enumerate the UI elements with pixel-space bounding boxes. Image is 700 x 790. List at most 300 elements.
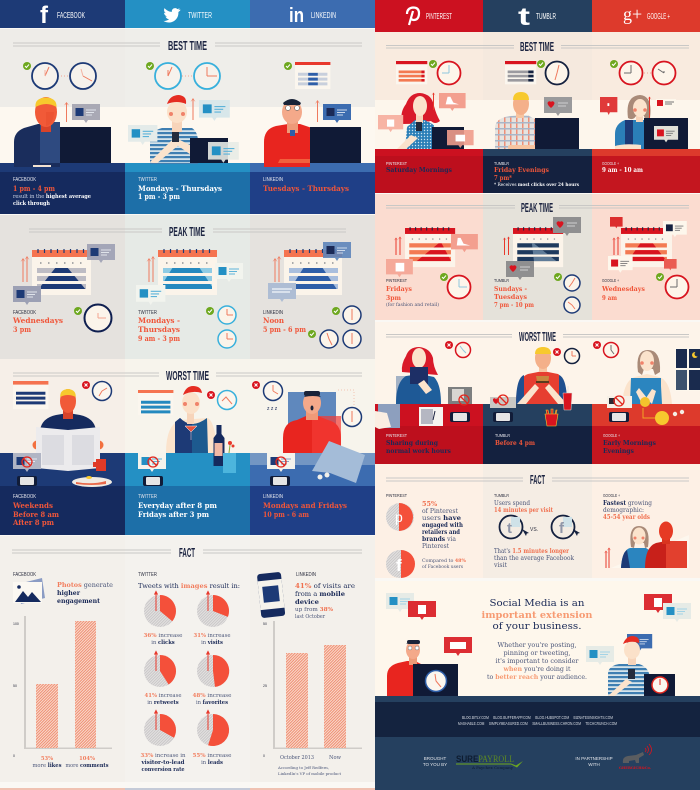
text: Tumblr best time: 7 pm* xyxy=(494,174,512,182)
person: Facebook user at laptop xyxy=(14,97,62,167)
text: LINKEDIN xyxy=(263,494,283,500)
person: man at laptop xyxy=(495,92,536,150)
header: Pinterest xyxy=(375,0,483,32)
bar chart: likes and comments: 50 xyxy=(13,684,17,688)
clock xyxy=(342,408,362,426)
header: Facebook: FACEBOOK xyxy=(57,11,85,20)
text: Twitter best time xyxy=(138,177,222,201)
text: engagement xyxy=(57,597,100,605)
bar chart: likes and comments: 100 xyxy=(13,622,19,626)
text: Facebook best time xyxy=(13,177,92,207)
header: Twitter xyxy=(125,0,250,28)
text: Wednesdays xyxy=(601,285,645,293)
arrow xyxy=(315,100,320,122)
panel: Pinterest peak time xyxy=(386,227,478,308)
clocks xyxy=(308,306,361,348)
heading: worst time (right): WORST TIME xyxy=(519,329,556,344)
text xyxy=(493,547,574,569)
text: Twitter best time: TWITTER xyxy=(138,177,157,183)
panel: Tumblr fact xyxy=(493,493,580,569)
table bands: worst time (left) xyxy=(0,453,375,535)
panel: Pinterest fact xyxy=(386,493,466,578)
clock xyxy=(218,390,236,410)
text: engaged with xyxy=(422,521,463,529)
text: Tumblr best time: TUMBLR xyxy=(494,161,510,166)
text: Twitter best time: Mondays - Thursdays xyxy=(138,184,222,193)
footer sources xyxy=(458,715,617,726)
panel: LinkedIn peak time xyxy=(263,242,361,348)
text: Pinterest best time: Saturday Mornings xyxy=(386,166,452,174)
bubbles xyxy=(128,100,239,163)
bubbles xyxy=(608,217,687,273)
text: Facebook best time: 1 pm - 4 pm xyxy=(13,184,56,193)
bar chart: likes and comments xyxy=(13,616,112,769)
panel: Google+ peak time xyxy=(601,217,688,302)
heading: peak time (right): PEAK TIME xyxy=(521,200,553,215)
calendar xyxy=(513,227,563,267)
text: PINTEREST xyxy=(386,278,407,283)
laptop xyxy=(60,127,111,164)
arrows xyxy=(20,256,30,282)
calendar xyxy=(13,381,48,409)
panel: Twitter best time xyxy=(128,62,239,164)
text: Facebook best time: click through xyxy=(13,201,50,207)
text: Everyday after 8 pm xyxy=(138,501,218,510)
text: last October xyxy=(295,614,325,620)
clock xyxy=(604,342,618,358)
pie: favorites xyxy=(197,652,229,687)
text: Pinterest best time: PINTEREST xyxy=(386,161,407,166)
pie: Facebook: f xyxy=(396,556,402,575)
icon: phone xyxy=(257,572,285,618)
source note: According to Jeff Redfern, xyxy=(277,765,329,770)
text: That's 1.5 minutes longer xyxy=(494,547,569,555)
person: LinkedIn user at laptop xyxy=(264,99,312,167)
bar chart: likes and comments: 0 xyxy=(13,754,15,758)
text: Users spend xyxy=(494,499,530,507)
text xyxy=(57,581,113,605)
text: 9 am xyxy=(602,294,617,302)
text: Weekends xyxy=(12,501,53,510)
text: TUMBLR xyxy=(494,278,510,283)
panel: Google+ fact xyxy=(603,493,689,568)
label: in leads xyxy=(201,760,223,766)
laptop xyxy=(432,127,464,149)
text: Facebook best time: result in the highest average xyxy=(13,194,92,200)
text: Fastest growing xyxy=(603,499,652,507)
in partnership with: IN PARTNERSHIP xyxy=(575,756,613,761)
text: Tumblr best time: * Receives most clicks over 24 hours xyxy=(494,182,579,188)
footer bands xyxy=(375,696,700,790)
text: GOOGLE + xyxy=(602,278,619,283)
source note: LinkedIn's VP of mobile product xyxy=(278,771,341,776)
text: Tuesdays xyxy=(494,293,527,301)
bar chart: likes and comments: more comments xyxy=(66,763,109,769)
logo: SurePayroll: A Paychex Company xyxy=(471,766,513,770)
laptop xyxy=(644,118,688,149)
clock icon: Tumblr: t xyxy=(507,520,512,537)
open papers xyxy=(312,441,365,483)
closing heading: important extension xyxy=(482,610,593,621)
text xyxy=(295,582,355,620)
text: of Facebook users xyxy=(422,564,464,570)
arrow xyxy=(190,98,196,120)
text xyxy=(138,494,218,519)
pie: Pinterest: p xyxy=(395,509,403,525)
text: TWITTER xyxy=(138,310,157,316)
calendar xyxy=(621,227,672,267)
text: LinkedIn best time: LINKEDIN xyxy=(263,177,283,183)
text xyxy=(12,310,63,334)
bubbles xyxy=(600,97,678,142)
laptop with clock xyxy=(413,664,458,697)
label: 48% increase xyxy=(192,693,232,699)
text: Tumblr best time xyxy=(494,161,579,188)
text: 55% xyxy=(422,500,438,508)
text xyxy=(603,499,652,521)
bar chart: mobile visits: 0 xyxy=(263,754,265,758)
vs label: VS. xyxy=(530,527,538,533)
panel: LinkedIn fact: LINKEDIN xyxy=(296,572,316,578)
text: Compared to 48% xyxy=(422,558,466,564)
laptop with blocked bubble xyxy=(448,387,472,405)
text: users have xyxy=(422,514,461,522)
header: Google+: g+ xyxy=(623,4,642,24)
calendar xyxy=(405,227,455,267)
label: in visits xyxy=(201,640,223,646)
heading: peak time (left): PEAK TIME xyxy=(169,224,205,239)
text xyxy=(263,494,347,519)
text: Before 8 am xyxy=(13,510,60,519)
panel: Twitter peak time xyxy=(136,249,243,348)
text: After 8 pm xyxy=(12,518,55,527)
yarn xyxy=(643,408,684,425)
arrow xyxy=(648,96,652,118)
arrows xyxy=(272,256,282,282)
panel: Google+ worst time xyxy=(593,341,700,455)
closing text: pinning or tweeting, xyxy=(504,650,571,657)
text: visit xyxy=(493,561,507,569)
text xyxy=(386,433,451,455)
person: woman at laptop xyxy=(615,95,651,150)
re-draw laptop bases over band xyxy=(14,163,310,167)
header: LinkedIn: LINKEDIN xyxy=(311,11,336,20)
in partnership with: WITH xyxy=(588,762,600,767)
text: Photos generate xyxy=(57,581,113,589)
pie: leads xyxy=(197,710,229,746)
bar chart: likes and comments: 104% xyxy=(79,756,95,762)
arrows xyxy=(146,256,156,282)
header: Google+ xyxy=(592,0,700,32)
panel: Google+ best time xyxy=(600,60,688,150)
table bands: best time (left) xyxy=(0,163,375,214)
panel: Facebook worst time xyxy=(12,381,112,527)
arrows xyxy=(502,236,510,255)
header: Tumblr: TUMBLR xyxy=(536,12,556,21)
cursors xyxy=(522,529,580,536)
header: Google+: GOOGLE + xyxy=(647,12,670,21)
text: 10 pm - 6 am xyxy=(263,510,310,519)
calendar xyxy=(284,249,342,295)
clocks: Facebook best time xyxy=(23,62,96,89)
clock xyxy=(666,276,688,298)
panel: Pinterest fact: PINTEREST xyxy=(386,493,407,498)
bar chart: mobile visits xyxy=(263,621,362,761)
text: Twitter best time: 1 pm - 3 pm xyxy=(138,192,181,201)
clock xyxy=(264,382,282,400)
text: 5 pm - 6 pm xyxy=(263,325,307,334)
panel: Twitter fact xyxy=(138,572,240,773)
header: Tumblr xyxy=(483,0,592,32)
bar chart: mobile visits: October 2013 xyxy=(280,755,314,761)
panel: Twitter fact: TWITTER xyxy=(138,572,157,578)
header: Twitter: TWITTER xyxy=(188,11,212,20)
arrow xyxy=(432,92,436,110)
closing text: Whether you're posting, xyxy=(498,642,577,649)
clock xyxy=(546,62,568,84)
books xyxy=(375,404,443,429)
closing text: it's important to consider xyxy=(496,658,579,665)
closing text xyxy=(487,642,587,681)
calendar xyxy=(32,249,91,295)
clock icon: Facebook: f xyxy=(559,520,565,537)
calendar xyxy=(505,61,536,84)
laptop xyxy=(310,127,361,164)
bar chart: mobile visits: 25 xyxy=(263,684,267,688)
text: Mondays and Fridays xyxy=(263,501,347,510)
subheading: Tweets with images result in: xyxy=(138,582,240,590)
text xyxy=(494,499,553,514)
text: Tumblr best time: Friday Evenings xyxy=(494,166,549,174)
bubble xyxy=(72,104,100,123)
text: PINTEREST xyxy=(386,433,407,438)
text: Sundays - xyxy=(494,285,527,293)
text: brands via xyxy=(422,535,456,543)
text: Evenings xyxy=(603,447,634,455)
panel: Google+ fact: GOOGLE + xyxy=(603,493,620,498)
bubble xyxy=(323,104,351,123)
brought to you by: BROUGHT xyxy=(424,756,447,761)
table bands: best time (right) xyxy=(375,149,700,193)
bubble no twitter xyxy=(138,453,166,472)
closing text: when you're doing it xyxy=(502,666,571,673)
heading: fact (left) xyxy=(12,545,362,560)
text: FACEBOOK xyxy=(13,494,37,500)
person: in bed xyxy=(283,391,341,453)
bar chart: likes and comments: 53% xyxy=(41,756,53,762)
icon: photos xyxy=(13,578,45,604)
fries xyxy=(545,409,558,426)
plate xyxy=(72,476,112,487)
label: in retweets xyxy=(147,700,179,706)
panel: Tumblr best time xyxy=(495,60,579,150)
person: Twitter user with phone xyxy=(150,95,200,164)
text: Pinterest xyxy=(422,542,449,550)
text: retailers and xyxy=(422,528,460,536)
label: 33% increase in xyxy=(140,753,186,759)
heading: peak time (left) xyxy=(29,224,346,239)
right column backgrounds xyxy=(375,32,700,696)
text: than the average Facebook xyxy=(494,554,574,562)
sleep marks: z z z xyxy=(267,406,278,412)
panel: Facebook fact: FACEBOOK xyxy=(13,572,37,578)
panel: Facebook best time xyxy=(14,62,111,167)
panel: LinkedIn fact xyxy=(257,572,362,776)
arrow xyxy=(64,102,69,122)
bubble xyxy=(544,97,572,116)
text: 7 pm - 10 pm xyxy=(494,301,534,309)
window at night xyxy=(675,348,700,391)
text: up from 38% xyxy=(295,607,333,613)
panel: Pinterest worst time xyxy=(375,341,472,455)
closing heading: of your business. xyxy=(492,621,582,632)
glasses on table xyxy=(318,472,330,480)
panel: Twitter worst time xyxy=(138,386,236,519)
text xyxy=(494,278,534,309)
clock xyxy=(564,348,580,364)
text: Noon xyxy=(263,316,284,325)
laptop xyxy=(190,138,228,163)
text: demographic: xyxy=(603,506,644,514)
text xyxy=(12,494,60,527)
text: Early Mornings xyxy=(603,439,656,447)
clock xyxy=(84,304,112,332)
closing panel xyxy=(386,593,691,698)
pie: retweets xyxy=(144,652,176,687)
pie: visits xyxy=(197,592,229,627)
text: FACEBOOK xyxy=(13,310,37,316)
text: 41% of visits are xyxy=(295,582,355,590)
heading: best time (left): BEST TIME xyxy=(168,38,207,53)
text xyxy=(386,278,439,308)
flower vase xyxy=(223,441,236,473)
clocks xyxy=(554,273,580,313)
laptop with clock xyxy=(644,674,675,696)
text: Fridays xyxy=(386,285,412,293)
clocks: Twitter best time xyxy=(146,62,220,89)
text: 9 am - 3 pm xyxy=(138,334,181,343)
text: from a mobile xyxy=(295,590,345,598)
text: TWITTER xyxy=(138,494,157,500)
heading: fact (right): FACT xyxy=(530,472,545,487)
heading: worst time (left): WORST TIME xyxy=(166,368,209,383)
panel: LinkedIn worst time xyxy=(252,381,365,519)
label: 36% increase xyxy=(144,633,182,639)
panel: Tumblr worst time xyxy=(490,347,580,447)
bubble no linkedin xyxy=(267,453,295,472)
text: Wednesdays xyxy=(12,316,63,325)
brought to you by xyxy=(423,756,447,767)
bar chart: likes and comments: more likes xyxy=(32,763,62,769)
panel: Facebook peak time xyxy=(12,244,115,334)
bubble blocked tumblr xyxy=(490,395,516,408)
logo: SurePayroll xyxy=(456,754,523,770)
logo: Ghergich & Co. xyxy=(619,744,652,770)
person: eating burger xyxy=(516,347,567,404)
label: in favorites xyxy=(196,700,228,706)
text: Pinterest best time xyxy=(386,161,452,174)
bar chart: mobile visits: Now xyxy=(329,755,342,761)
calendar xyxy=(295,62,330,89)
text: Facebook best time: FACEBOOK xyxy=(13,177,37,183)
header: Tumblr: t xyxy=(518,3,531,31)
mug xyxy=(93,459,106,471)
brought to you by: TO YOU BY xyxy=(423,762,447,767)
text: 3pm xyxy=(386,294,401,302)
header: Facebook xyxy=(0,0,125,29)
heading: best time (right): BEST TIME xyxy=(520,39,554,54)
text: Before 4 pm xyxy=(495,439,535,447)
text: 3 pm xyxy=(13,325,32,334)
heading: fact (right) xyxy=(386,472,689,487)
illustration: demographic couple xyxy=(604,522,689,568)
bubbles xyxy=(386,593,691,665)
text: LINKEDIN xyxy=(263,310,283,316)
panel: LinkedIn best time xyxy=(264,62,361,167)
bubbles xyxy=(136,263,243,305)
person: woman with phone xyxy=(397,93,440,149)
arrows xyxy=(612,236,620,255)
text: Google+ best time xyxy=(602,161,643,174)
text xyxy=(495,433,535,447)
text: 14 minutes per visit xyxy=(494,506,553,514)
person: woman knitting xyxy=(622,350,672,407)
bar chart: mobile visits: 50 xyxy=(263,622,267,626)
label: 55% increase xyxy=(192,753,232,759)
pie: conversion xyxy=(144,710,176,746)
header: LinkedIn xyxy=(250,0,375,28)
text: Google+ best time: 9 am - 10 am xyxy=(602,166,643,174)
text: higher xyxy=(57,589,81,597)
header: LinkedIn: in xyxy=(289,5,304,27)
header: Facebook: f xyxy=(40,2,49,29)
closing heading: Social Media is an xyxy=(490,598,584,609)
closing text: to better reach your audience. xyxy=(487,674,587,681)
bubble no facebook xyxy=(13,453,41,472)
text: 45-54 year olds xyxy=(603,513,650,521)
clocks xyxy=(206,306,236,348)
label: in clicks xyxy=(151,640,175,646)
drink xyxy=(563,386,572,410)
text: normal work hours xyxy=(386,447,451,455)
text: TUMBLR xyxy=(495,433,511,438)
text: Sharing during xyxy=(386,439,438,447)
footer sources: BLOG.BITLY.COM BLOG.BUFFERAPP.COM BLOG.HUBSPOT.COM BIZNATESINSIGHTS.COM xyxy=(462,715,613,720)
pie: clicks xyxy=(144,592,176,627)
bubbles xyxy=(13,244,115,305)
table bands: worst time (right) xyxy=(375,404,700,464)
text: (for fashion and retail) xyxy=(386,301,439,308)
logo: SurePayroll: SUREPAYROLL xyxy=(456,754,514,764)
person: LinkedIn user with clock laptop xyxy=(387,640,421,698)
bubbles xyxy=(506,217,581,280)
calendar xyxy=(396,61,427,84)
text: LinkedIn best time xyxy=(263,177,349,193)
clock xyxy=(448,276,470,298)
heading: best time (left) xyxy=(13,38,362,53)
text: of Pinterest xyxy=(422,507,458,515)
label: visitor-to-lead xyxy=(140,760,185,766)
text xyxy=(603,433,656,455)
panel: Tumblr peak time xyxy=(494,217,581,313)
laptop xyxy=(535,118,579,149)
text: LinkedIn best time: Tuesdays - Thursdays xyxy=(263,184,349,193)
footer sources: MASHABLE.COM SIMPLYMEASURED.COM SMALLBUSINESS.CHRON.COM TECHCRUNCH.COM xyxy=(458,721,617,726)
logo: Ghergich & Co.: GHERGICH&Co. xyxy=(619,765,652,770)
person: drinking cocktail xyxy=(166,386,217,453)
clocks xyxy=(620,62,676,84)
bubbles xyxy=(268,242,351,302)
